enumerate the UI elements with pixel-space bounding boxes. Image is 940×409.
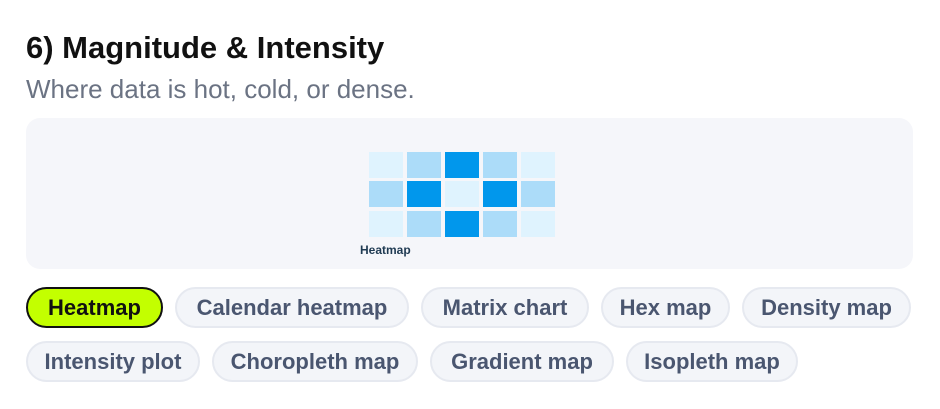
panel: heatmap preview bbox=[26, 118, 913, 269]
chip: Density map bbox=[742, 287, 911, 328]
chip: Hex map bbox=[601, 287, 730, 328]
chip: Choropleth map: Choropleth map bbox=[231, 348, 399, 374]
chart label: Heatmap bbox=[360, 243, 411, 257]
heatmap chart bbox=[369, 152, 555, 237]
chip: Intensity plot: Intensity plot bbox=[45, 348, 181, 374]
chip: Density map: Density map bbox=[761, 294, 892, 320]
chip: Calendar heatmap bbox=[175, 287, 409, 328]
chip: Heatmap (selected) bbox=[26, 287, 163, 328]
chip: Calendar heatmap: Calendar heatmap bbox=[197, 294, 387, 320]
title: 6) Magnitude & Intensity bbox=[26, 30, 384, 65]
chip: Choropleth map bbox=[212, 341, 418, 382]
chip: Hex map: Hex map bbox=[620, 294, 711, 320]
chip: Matrix chart: Matrix chart bbox=[443, 294, 567, 320]
chip: Isopleth map bbox=[626, 341, 798, 382]
chip: Gradient map: Gradient map bbox=[451, 348, 593, 374]
chip: Intensity plot bbox=[26, 341, 200, 382]
subtitle: Where data is hot, cold, or dense. bbox=[26, 74, 415, 104]
chip: Matrix chart bbox=[421, 287, 589, 328]
chip: Gradient map bbox=[430, 341, 614, 382]
chip: Isopleth map: Isopleth map bbox=[644, 348, 780, 374]
chip: Heatmap (selected): Heatmap bbox=[48, 294, 141, 320]
